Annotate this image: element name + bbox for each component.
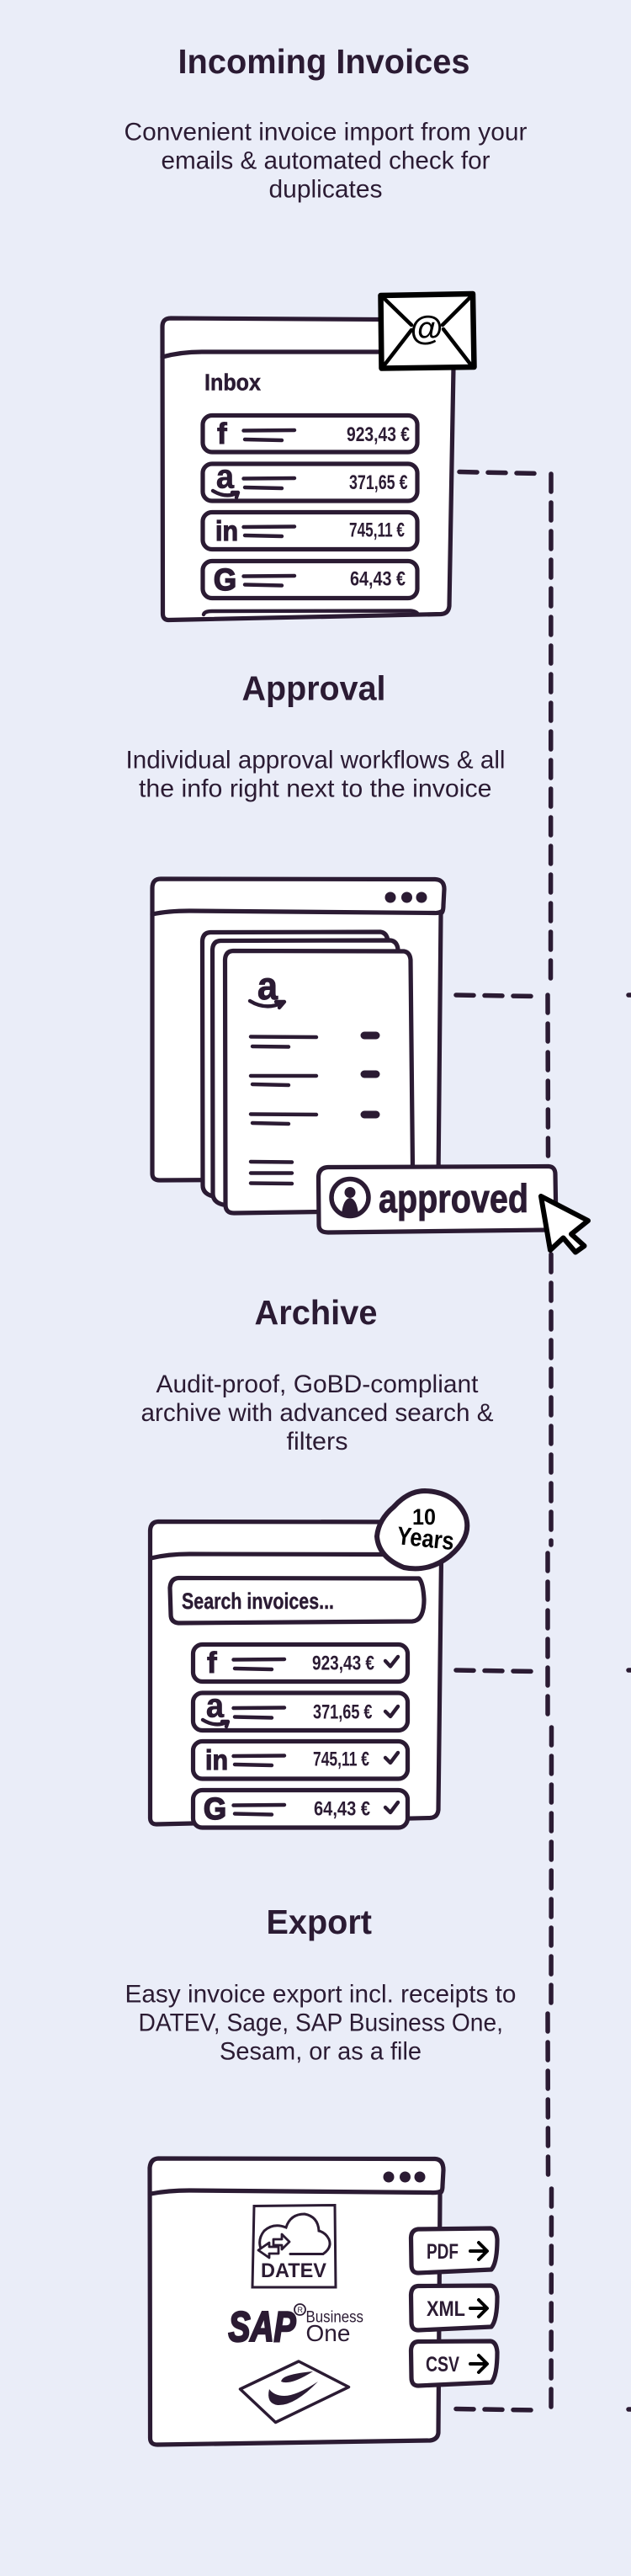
badge: 10 years: 10 bbox=[412, 1504, 436, 1530]
panel: approval window bbox=[152, 879, 444, 1213]
archived row: linkedin: in bbox=[205, 1744, 228, 1775]
icon: amazon logo: a bbox=[257, 964, 278, 1008]
invoice row: linkedin: in bbox=[215, 515, 238, 546]
archived row: facebook: f bbox=[207, 1647, 217, 1679]
button: approved: approved bbox=[379, 1176, 528, 1221]
panel: export window bbox=[150, 2158, 443, 2445]
invoice row: facebook: f bbox=[217, 418, 227, 450]
invoice row: amazon: a bbox=[216, 458, 235, 495]
logo: SAP Business One bbox=[229, 2303, 363, 2350]
heading: Approval: Approval bbox=[242, 668, 385, 707]
text block: approval description: the info right next to the invoice bbox=[139, 774, 491, 803]
badge: 10 years bbox=[377, 1491, 467, 1568]
text block: incoming invoices description: duplicates bbox=[269, 175, 382, 204]
dashed connector line bbox=[456, 471, 631, 2410]
archived row: linkedin bbox=[194, 1741, 407, 1779]
invoice row: google bbox=[203, 561, 417, 598]
text block: export description: Easy invoice export incl. receipts to bbox=[125, 1980, 517, 2009]
panel: inbox window: Inbox bbox=[204, 369, 261, 396]
button: XML export bbox=[411, 2286, 497, 2330]
button: PDF export: PDF bbox=[427, 2240, 459, 2264]
document stack bbox=[202, 932, 413, 1213]
text block: archive description bbox=[141, 1370, 494, 1456]
panel: archive window bbox=[150, 1522, 442, 1828]
text block: incoming invoices description: emails & automated check for bbox=[162, 146, 490, 175]
panel: inbox window bbox=[162, 318, 454, 620]
text block: export description: Sesam, or as a file bbox=[220, 2037, 422, 2066]
icon: amazon logo bbox=[250, 964, 284, 1008]
button: CSV export bbox=[411, 2341, 497, 2386]
text block: archive description: archive with advanced search & bbox=[141, 1399, 494, 1427]
text block: export description: DATEV, Sage, SAP Business One, bbox=[138, 2009, 503, 2037]
icon: email envelope: @ bbox=[410, 310, 443, 347]
text block: approval description: Individual approval workflows & all bbox=[126, 746, 505, 774]
text block: archive description: Audit-proof, GoBD-compliant bbox=[156, 1370, 478, 1398]
button: approved bbox=[318, 1167, 556, 1232]
logo: SAP Business One: SAP bbox=[229, 2303, 296, 2350]
heading: Export: Export bbox=[266, 1903, 372, 1941]
invoice row: amazon bbox=[203, 458, 417, 501]
archived row: google: G bbox=[204, 1791, 226, 1826]
invoice row: linkedin: 745,11 € bbox=[349, 519, 405, 542]
button: PDF export bbox=[411, 2228, 497, 2273]
text block: incoming invoices description: Convenient invoice import from your bbox=[125, 118, 528, 146]
invoice row: linkedin bbox=[203, 512, 417, 549]
logo: DATEV: DATEV bbox=[261, 2259, 326, 2282]
invoice row: google: G bbox=[214, 562, 236, 597]
logo: SAP Business One: Business bbox=[306, 2308, 363, 2327]
invoice row: amazon: 371,65 € bbox=[349, 471, 407, 494]
logo: sesam bbox=[241, 2361, 348, 2423]
archived row: google bbox=[194, 1790, 407, 1828]
button: CSV export: CSV bbox=[426, 2353, 459, 2376]
text block: archive description: filters bbox=[286, 1428, 348, 1456]
search box bbox=[170, 1578, 424, 1623]
invoice row: google: 64,43 € bbox=[350, 567, 406, 591]
archived row: linkedin: 745,11 € bbox=[313, 1748, 369, 1771]
archived row: google: 64,43 € bbox=[314, 1798, 370, 1820]
archived row: facebook bbox=[194, 1645, 407, 1682]
search box: Search invoices... bbox=[182, 1589, 334, 1614]
heading: Archive: Archive bbox=[254, 1293, 377, 1332]
icon: email envelope bbox=[380, 294, 475, 369]
archived row: amazon bbox=[194, 1687, 407, 1731]
logo: SAP Business One: R bbox=[298, 2306, 303, 2314]
button: XML export: XML bbox=[427, 2297, 465, 2321]
heading: Incoming Invoices: Incoming Invoices bbox=[178, 42, 469, 81]
invoice row: facebook: 923,43 € bbox=[347, 423, 410, 446]
archived row: amazon: 371,65 € bbox=[313, 1700, 372, 1724]
text block: incoming invoices description bbox=[125, 118, 528, 204]
logo: SAP Business One: One bbox=[306, 2320, 350, 2346]
text block: approval description bbox=[126, 746, 505, 803]
logo: DATEV bbox=[252, 2206, 336, 2287]
icon: mouse cursor bbox=[541, 1196, 588, 1253]
invoice row: facebook bbox=[203, 416, 417, 452]
text block: export description bbox=[125, 1980, 517, 2066]
archived row: facebook: 923,43 € bbox=[312, 1652, 374, 1675]
archived row: amazon: a bbox=[206, 1687, 225, 1724]
badge: 10 years: Years bbox=[395, 1522, 455, 1556]
